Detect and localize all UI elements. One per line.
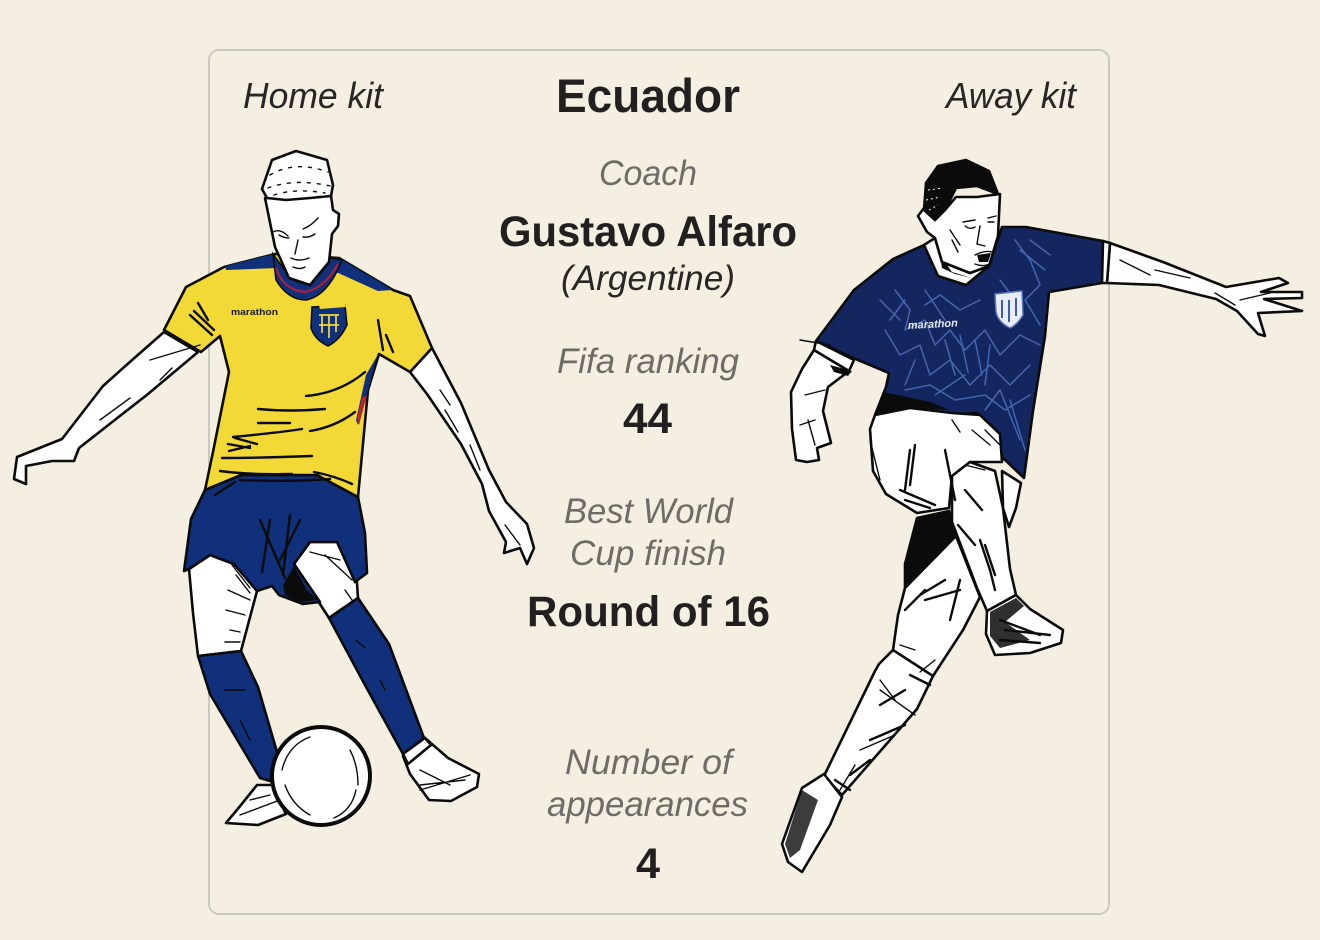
heading: Away kit: Away kit: [944, 75, 1078, 116]
text block: coach: (Argentine): [561, 259, 735, 298]
boot sock cuff: [403, 738, 431, 764]
text block: coach: Gustavo Alfaro: [499, 208, 797, 256]
text block: Fifa ranking: [557, 342, 740, 443]
left cuff: [814, 341, 854, 371]
text block: best World Cup finish: [527, 492, 770, 636]
text block: number of appearances: [547, 743, 748, 888]
shoulder panels: [226, 254, 393, 291]
jersey folds: [220, 372, 365, 484]
shorts folds: [215, 479, 330, 578]
text block: best World Cup finish: Round of 16: [527, 588, 770, 636]
illustration: home kit player: [14, 151, 534, 825]
left thigh: [189, 555, 257, 656]
text block: coach: Coach: [599, 154, 697, 193]
ball: [272, 727, 370, 825]
jersey pattern: [880, 240, 1050, 450]
face details: [273, 218, 318, 268]
planted boot: [226, 785, 286, 825]
text block: Fifa ranking: 44: [623, 395, 672, 443]
lifted boot: [403, 738, 479, 801]
side panel: [356, 356, 377, 425]
shorts: [184, 475, 367, 604]
leg hatching: [835, 445, 995, 790]
rear shorts strip: [1002, 471, 1021, 527]
right sock: [329, 598, 424, 754]
raised boot: [986, 595, 1063, 655]
crest: [311, 303, 347, 346]
right cuff: [1102, 241, 1110, 283]
leg hatching: [100, 345, 520, 815]
dark shorts underside: [905, 511, 956, 588]
text block: number of appearances: Number of: [565, 743, 735, 782]
text block: best World Cup finish: Cup finish: [570, 534, 726, 573]
neck: [924, 238, 989, 285]
text block: coach: [499, 154, 797, 298]
jersey hem shadow: [875, 392, 950, 415]
sponsor: marathon: [908, 317, 958, 332]
left sock: [198, 651, 277, 781]
raised shin: [952, 462, 1016, 611]
back sock: [824, 650, 933, 795]
face details: [950, 216, 996, 266]
back thigh: [893, 536, 980, 678]
sponsor: marathon: [231, 307, 278, 317]
text block: number of appearances: appearances: [547, 785, 748, 824]
lowered arm: [791, 350, 849, 462]
raised thigh: [870, 408, 1002, 513]
title: Ecuador: Ecuador: [556, 69, 740, 122]
illustration: away kit player: [782, 160, 1302, 872]
crest: [995, 291, 1023, 328]
jersey: [816, 227, 1103, 478]
outstretched arm: [1107, 243, 1302, 336]
collar: [273, 254, 342, 300]
hair: [924, 160, 998, 220]
right thigh: [294, 542, 358, 618]
text block: Fifa ranking: Fifa ranking: [557, 342, 740, 381]
left arm: [14, 332, 198, 484]
text block: best World Cup finish: Best World: [564, 492, 735, 531]
head: [265, 196, 339, 285]
panel: team card border: [209, 50, 1109, 914]
head: [918, 194, 1000, 273]
shorts shadow: [283, 566, 318, 602]
back boot: [782, 774, 842, 872]
right arm: [410, 348, 534, 564]
heading: Home kit: Home kit: [243, 75, 385, 116]
hair: [262, 151, 333, 200]
collar trim: [276, 264, 338, 292]
text block: number of appearances: 4: [636, 840, 660, 888]
jersey: [164, 254, 432, 497]
